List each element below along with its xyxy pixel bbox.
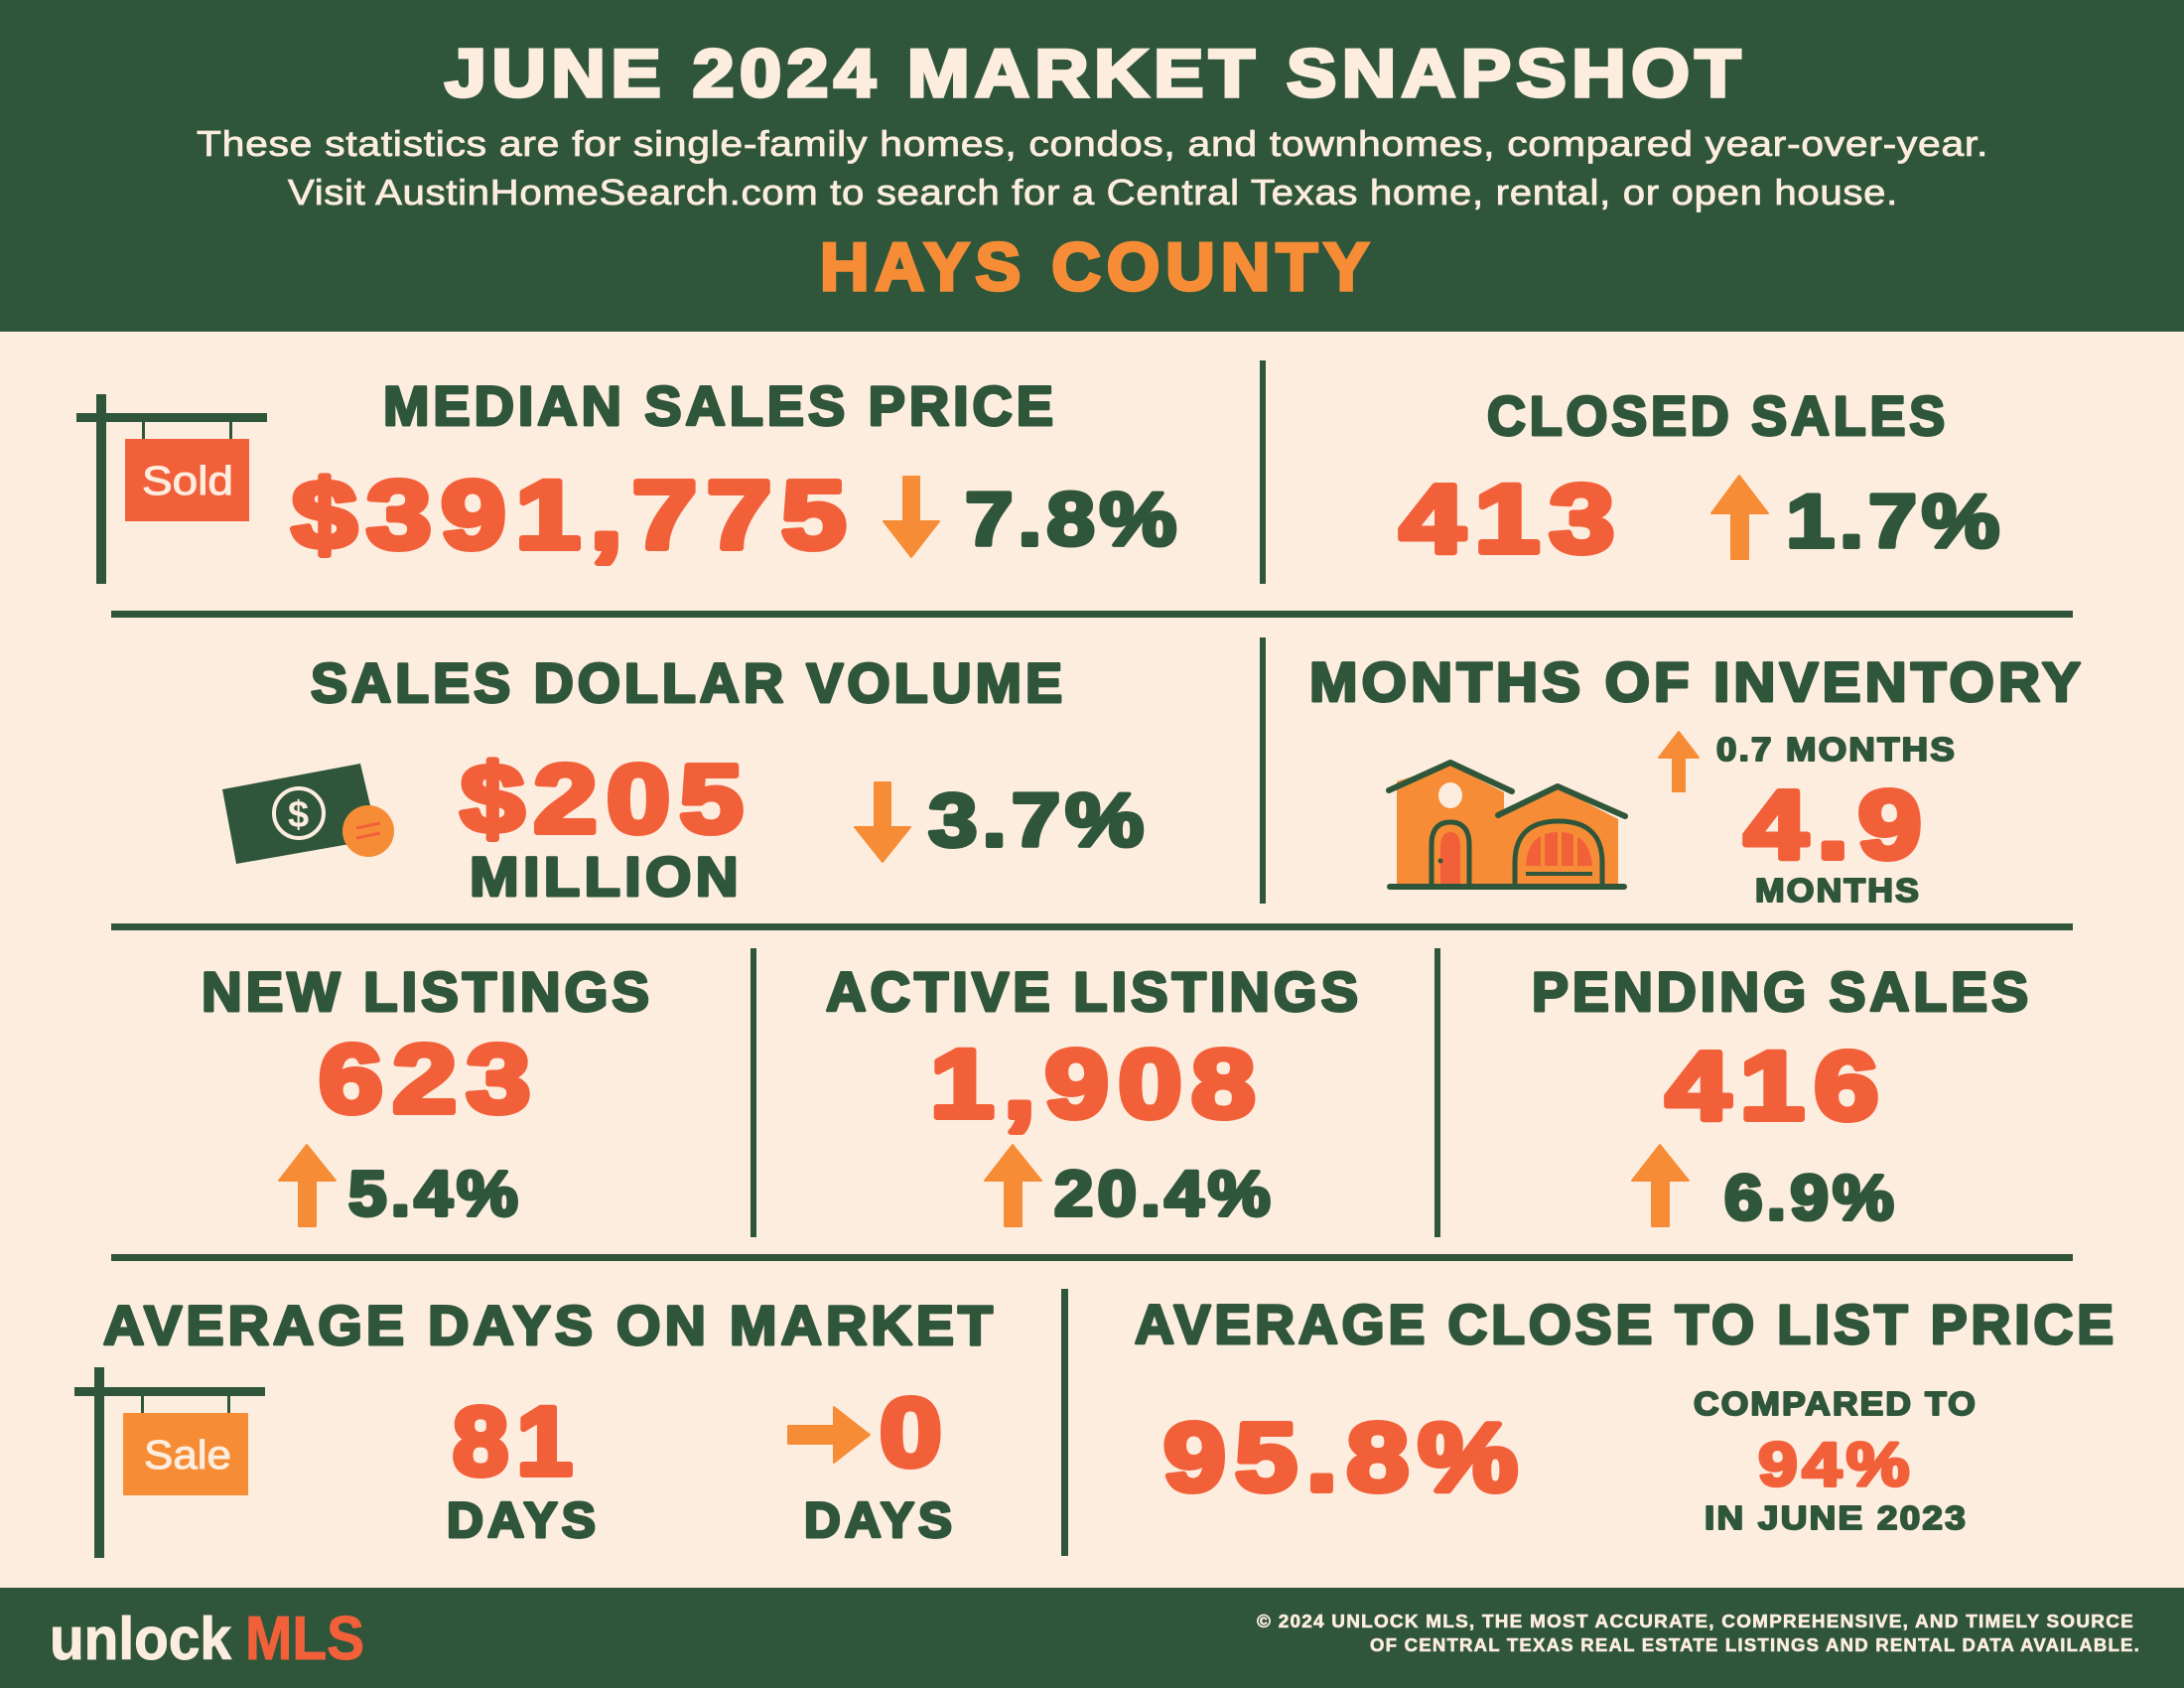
icon: sale sign xyxy=(74,1367,265,1558)
county name: HAYS COUNTY xyxy=(820,229,1375,305)
arrow up xyxy=(1711,476,1768,559)
value: $391,775 xyxy=(292,461,856,569)
value: $205 xyxy=(461,745,752,853)
icon: sold sign: Sold xyxy=(142,458,233,503)
heading: ACTIVE LISTINGS xyxy=(826,960,1362,1023)
subtitle line 2: Visit AustinHomeSearch.com to search for a Central Texas home, rental, or open house. xyxy=(288,172,1898,212)
header band xyxy=(0,0,2184,332)
divider xyxy=(1434,948,1440,1237)
value: 416 xyxy=(1666,1032,1888,1140)
divider xyxy=(111,1254,2073,1261)
panel: new listings xyxy=(202,960,653,1229)
value: 4.9 xyxy=(1744,771,1931,879)
unit: DAYS xyxy=(447,1492,600,1548)
heading: MONTHS OF INVENTORY xyxy=(1309,650,2085,713)
heading: PENDING SALES xyxy=(1532,960,2032,1023)
value: 95.8% xyxy=(1163,1403,1527,1511)
change: 0.7 MONTHS xyxy=(1716,731,1957,768)
heading: NEW LISTINGS xyxy=(202,960,653,1023)
footer band xyxy=(0,1588,2184,1688)
comparison label: COMPARED TO xyxy=(1694,1385,1978,1422)
heading: SALES DOLLAR VOLUME xyxy=(311,651,1066,714)
heading: AVERAGE CLOSE TO LIST PRICE xyxy=(1135,1293,2117,1355)
panel: median sales price xyxy=(76,374,1181,584)
comparison date: IN JUNE 2023 xyxy=(1705,1499,1968,1536)
logo: MLS xyxy=(245,1605,364,1673)
panel: months of inventory xyxy=(1309,650,2085,909)
icon: house xyxy=(1387,763,1627,890)
change: 7.8% xyxy=(965,478,1181,562)
comparison value: 94% xyxy=(1758,1431,1914,1499)
arrow up xyxy=(1659,732,1699,791)
arrow down xyxy=(855,782,910,862)
unit: MONTHS xyxy=(1755,872,1921,909)
heading: MEDIAN SALES PRICE xyxy=(383,374,1057,437)
change: 6.9% xyxy=(1724,1162,1898,1233)
divider xyxy=(111,923,2073,930)
logo: unlock xyxy=(50,1606,232,1672)
change value: 0 xyxy=(880,1378,951,1486)
change: 1.7% xyxy=(1786,480,2004,564)
divider xyxy=(1260,637,1266,904)
value: 1,908 xyxy=(930,1030,1265,1138)
panel: average close to list price xyxy=(1135,1293,2117,1536)
change unit: DAYS xyxy=(804,1492,956,1548)
arrow up xyxy=(279,1145,336,1226)
divider xyxy=(1061,1289,1068,1556)
unit: MILLION xyxy=(470,845,743,908)
copyright line 1: © 2024 UNLOCK MLS, THE MOST ACCURATE, COMPREHENSIVE, AND TIMELY SOURCE xyxy=(1257,1612,2134,1631)
change: 5.4% xyxy=(348,1158,522,1229)
heading: AVERAGE DAYS ON MARKET xyxy=(103,1294,997,1356)
logo xyxy=(50,1605,364,1673)
title: JUNE 2024 MARKET SNAPSHOT xyxy=(445,36,1746,111)
panel: closed sales xyxy=(1400,384,2004,573)
arrow down xyxy=(884,477,939,557)
arrow up xyxy=(1632,1145,1689,1226)
value: 413 xyxy=(1400,465,1624,573)
icon: money: $ xyxy=(288,794,309,836)
panel: active listings xyxy=(826,960,1362,1229)
icon: sold sign xyxy=(76,394,267,584)
panel: sales dollar volume xyxy=(222,651,1149,908)
panel: average days on market xyxy=(74,1294,997,1558)
value: 81 xyxy=(453,1387,581,1495)
divider xyxy=(1260,360,1266,584)
panel: pending sales xyxy=(1532,960,2032,1233)
icon: sale sign: Sale xyxy=(144,1432,231,1477)
arrow up xyxy=(985,1145,1041,1226)
divider xyxy=(751,948,756,1237)
heading: CLOSED SALES xyxy=(1487,384,1949,447)
divider xyxy=(111,611,2073,618)
change: 20.4% xyxy=(1054,1158,1275,1229)
arrow right xyxy=(788,1407,870,1463)
icon: money xyxy=(222,764,394,864)
subtitle line 1: These statistics are for single-family homes, condos, and townhomes, compared year-over-year. xyxy=(197,123,1988,164)
value: 623 xyxy=(319,1025,540,1133)
change: 3.7% xyxy=(928,778,1149,863)
copyright line 2: OF CENTRAL TEXAS REAL ESTATE LISTINGS AND RENTAL DATA AVAILABLE. xyxy=(1370,1635,2140,1655)
